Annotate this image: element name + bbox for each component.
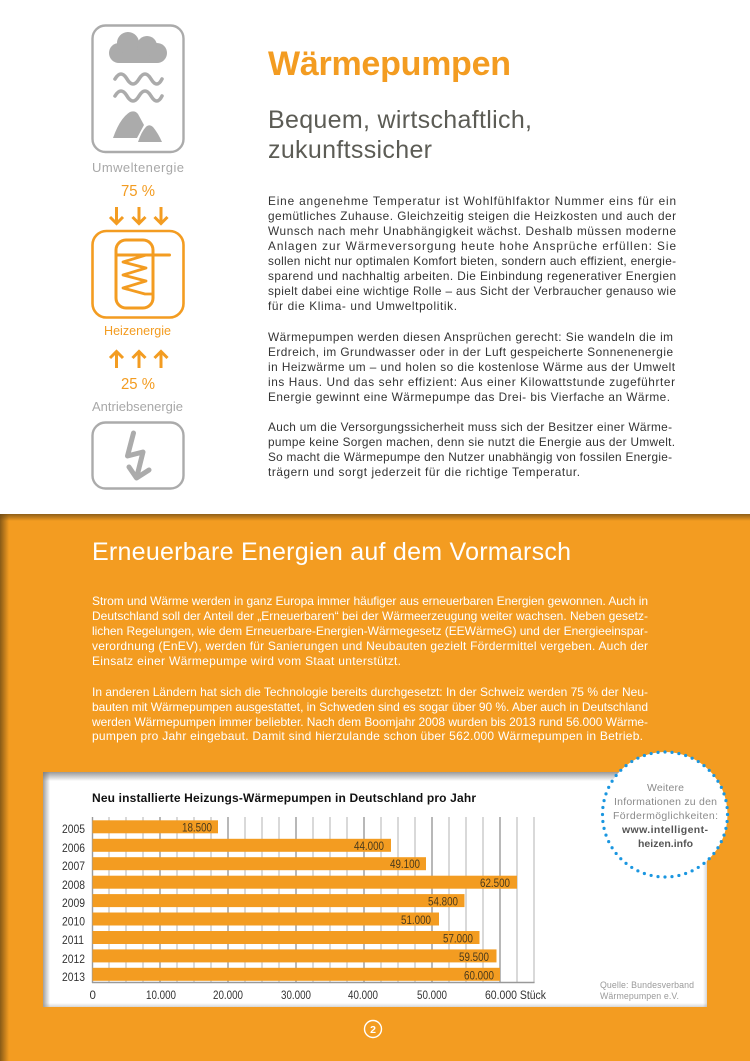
callout: further information: Fördermöglichkeiten: (613, 810, 718, 822)
text block: second paragraph: Wärmepumpen werden diesen Ansprüchen gerecht: Sie wandeln die im (268, 330, 673, 344)
bar: 2005 (62, 820, 218, 836)
text block: intro paragraph: für die Klima- und Umweltpolitik. (268, 299, 457, 313)
bar: 2005: 2005 (62, 824, 85, 836)
bar: 2009: 54.800 (428, 896, 458, 908)
text block: orange paragraph two: werden Wärmepumpen immer beliebter. Nach dem Boomjahr 2008 wurden bis 2013 rund 56.000 Wärme- (91, 715, 648, 729)
x axis labels: 30.000 (281, 990, 311, 1002)
label: Antriebsenergie: Antriebsenergie (92, 399, 183, 414)
callout: further information: Weitere (647, 782, 684, 794)
bar: 2012: 59.500 (459, 952, 489, 964)
text block: intro paragraph: Eine angenehme Temperatur ist Wohlfühlfaktor Nummer eins für ein (268, 194, 676, 208)
label: Heizenergie: Heizenergie (104, 323, 171, 338)
callout: further information: Informationen zu den (614, 796, 717, 808)
icon: environmental energy box (92, 26, 184, 152)
icon: down arrows (110, 207, 168, 224)
icon: electricity box (92, 422, 184, 488)
x axis labels: 60.000 Stück (485, 990, 546, 1002)
callout: further information: www.intelligent- (621, 824, 708, 836)
text block: third paragraph (268, 420, 675, 479)
bar: 2011: 2011 (62, 935, 84, 947)
panel: orange section background (0, 514, 750, 1061)
bar: 2010 (62, 912, 439, 928)
callout: further information (602, 752, 728, 877)
bar: 2013 (62, 968, 500, 984)
bar: 2008: 62.500 (480, 878, 510, 890)
page number: 2 (370, 1024, 376, 1036)
text block: third paragraph: Auch um die Versorgungssicherheit muss sich der Besitzer einer Wärme- (268, 420, 672, 434)
text block: orange paragraph two: pumpen pro Jahr eingebaut. Damit sind hierzulande schon über 562.000 Wärmepumpen in Betrieb. (92, 729, 643, 743)
bar: 2009: 2009 (62, 898, 85, 910)
subtitle (268, 106, 532, 164)
text block: intro paragraph: Wunsch nach mehr Unabhängigkeit wächst. Deshalb müssen moderne (268, 224, 676, 238)
text block: second paragraph: Energie gewinnt eine Wärmepumpe das Drei- bis Vierfache an Wärme. (268, 390, 670, 404)
x axis labels: 20.000 (213, 990, 243, 1002)
bar: 2006: 2006 (62, 843, 85, 855)
text block: intro paragraph: sollen nicht nur optimalen Komfort bieten, sondern auch effizient, energie- (268, 254, 676, 268)
text block: intro paragraph: spielt dabei eine wichtige Rolle – aus Sicht der Verbraucher genauso wie (268, 284, 676, 298)
text block: orange paragraph one: lichen Regelungen, wie dem Erneuerbare-Energien-Wärmegesetz (EEWärmeG) und der Energieeinspar- (92, 624, 648, 638)
bar: 2007 (62, 857, 426, 873)
x axis labels: 10.000 (146, 990, 176, 1002)
bar: 2009 (62, 894, 464, 910)
bar: 2005: 18.500 (182, 822, 212, 834)
bar: 2008: 2008 (62, 880, 85, 892)
bar: 2011 (62, 931, 480, 947)
subtitle: Bequem, wirtschaftlich, (268, 106, 532, 134)
label: Umweltenergie: Umweltenergie (92, 160, 184, 175)
panel: energy diagram (92, 26, 184, 488)
x axis labels (90, 990, 546, 1002)
text block: third paragraph: So macht die Wärmepumpe den Nutzer unabhängig von fossilen Energie- (268, 450, 672, 464)
subtitle: zukunftssicher (268, 136, 432, 164)
x axis labels: 0 (90, 990, 96, 1002)
text block: intro paragraph (268, 194, 676, 313)
source note (600, 980, 694, 1001)
icon: heat storage tank box (92, 231, 184, 318)
text block: second paragraph: ins Haus. Und das sehr effizient: Aus einer Kilowattstunde zugeführter (268, 375, 675, 389)
x axis labels: 40.000 (348, 990, 378, 1002)
text block: orange paragraph two (91, 685, 648, 743)
title: Wärmepumpen (268, 45, 511, 83)
source note: Quelle: Bundesverband (600, 980, 694, 990)
bar: 2012: 2012 (62, 954, 85, 966)
bar: 2006 (62, 839, 391, 855)
text block: orange paragraph one (92, 594, 648, 668)
bar: 2007: 49.100 (390, 859, 420, 871)
text block: second paragraph (268, 330, 676, 404)
source note: Wärmepumpen e.V. (600, 991, 679, 1001)
text block: orange paragraph two: In anderen Ländern hat sich die Technologie bereits durchgesetzt: In der Schweiz werden 75 % der Neu- (92, 685, 648, 699)
callout: further information: heizen.info (638, 838, 693, 850)
text block: orange paragraph one: Strom und Wärme werden in ganz Europa immer häufiger aus erneuerbaren Energien gewonnen. Auch in (92, 594, 648, 608)
x axis labels: 50.000 (417, 990, 447, 1002)
page number (364, 1020, 382, 1038)
text block: third paragraph: pumpe keine Sorgen machen, denn sie nutzt die Energie aus der Umwelt. (268, 435, 675, 449)
chart title: Neu installierte Heizungs-Wärmepumpen in Deutschland pro Jahr (92, 791, 476, 805)
bar: 2011: 57.000 (443, 934, 473, 946)
bar: 2012 (62, 949, 496, 966)
bar: 2008 (62, 876, 517, 892)
icon: up arrows (110, 352, 168, 368)
bar: 2013: 2013 (62, 972, 85, 984)
text block: orange paragraph one: Deutschland soll der Anteil der „Erneuerbaren“ bei der Wärmeerzeugung weiter wachsen. Neben gesetz- (92, 609, 648, 623)
text block: orange paragraph one: Einsatz einer Wärmepumpe wird vom Staat unterstützt. (92, 654, 401, 668)
bar: 2010: 51.000 (401, 915, 431, 927)
text block: intro paragraph: sparend und nachhaltig arbeiten. Die Einbindung regenerativer Energien (268, 269, 676, 283)
text block: second paragraph: in Heizwärme um – und holen so die kostenlose Wärme aus der Umwelt (268, 360, 676, 374)
text block: intro paragraph: gemütliches Zuhause. Gleichzeitig steigen die Heizkosten und auch der (268, 209, 676, 223)
text block: orange paragraph two: bauten mit Wärmepumpen ausgestattet, in Schweden sind es sogar über 90 %. Aber auch in Deutschland (92, 700, 648, 714)
bar: 2013: 60.000 (464, 970, 494, 982)
label: 75 %: 75 % (121, 183, 155, 200)
panel: chart card (43, 772, 707, 1007)
text block: intro paragraph: Anlagen zur Wärmeversorgung heute hohe Ansprüche erfüllen: Sie (268, 239, 676, 253)
bar: 2010: 2010 (62, 916, 85, 928)
bar: 2007: 2007 (62, 861, 85, 873)
text block: orange paragraph one: verordnung (EnEV), werden für Sanierungen und Neubauten gezielt Fördermittel vergeben. Auch der (92, 639, 648, 653)
text block: third paragraph: trägern und sorgt jederzeit für die richtige Temperatur. (268, 465, 580, 479)
bar: 2006: 44.000 (354, 841, 384, 853)
label: 25 %: 25 % (121, 376, 155, 393)
text block: second paragraph: Erdreich, im Grundwasser oder in der Luft gespeicherte Sonnenenergie (268, 345, 673, 359)
heading: renewable energies: Erneuerbare Energien auf dem Vormarsch (92, 538, 571, 566)
bar chart (62, 817, 546, 1002)
